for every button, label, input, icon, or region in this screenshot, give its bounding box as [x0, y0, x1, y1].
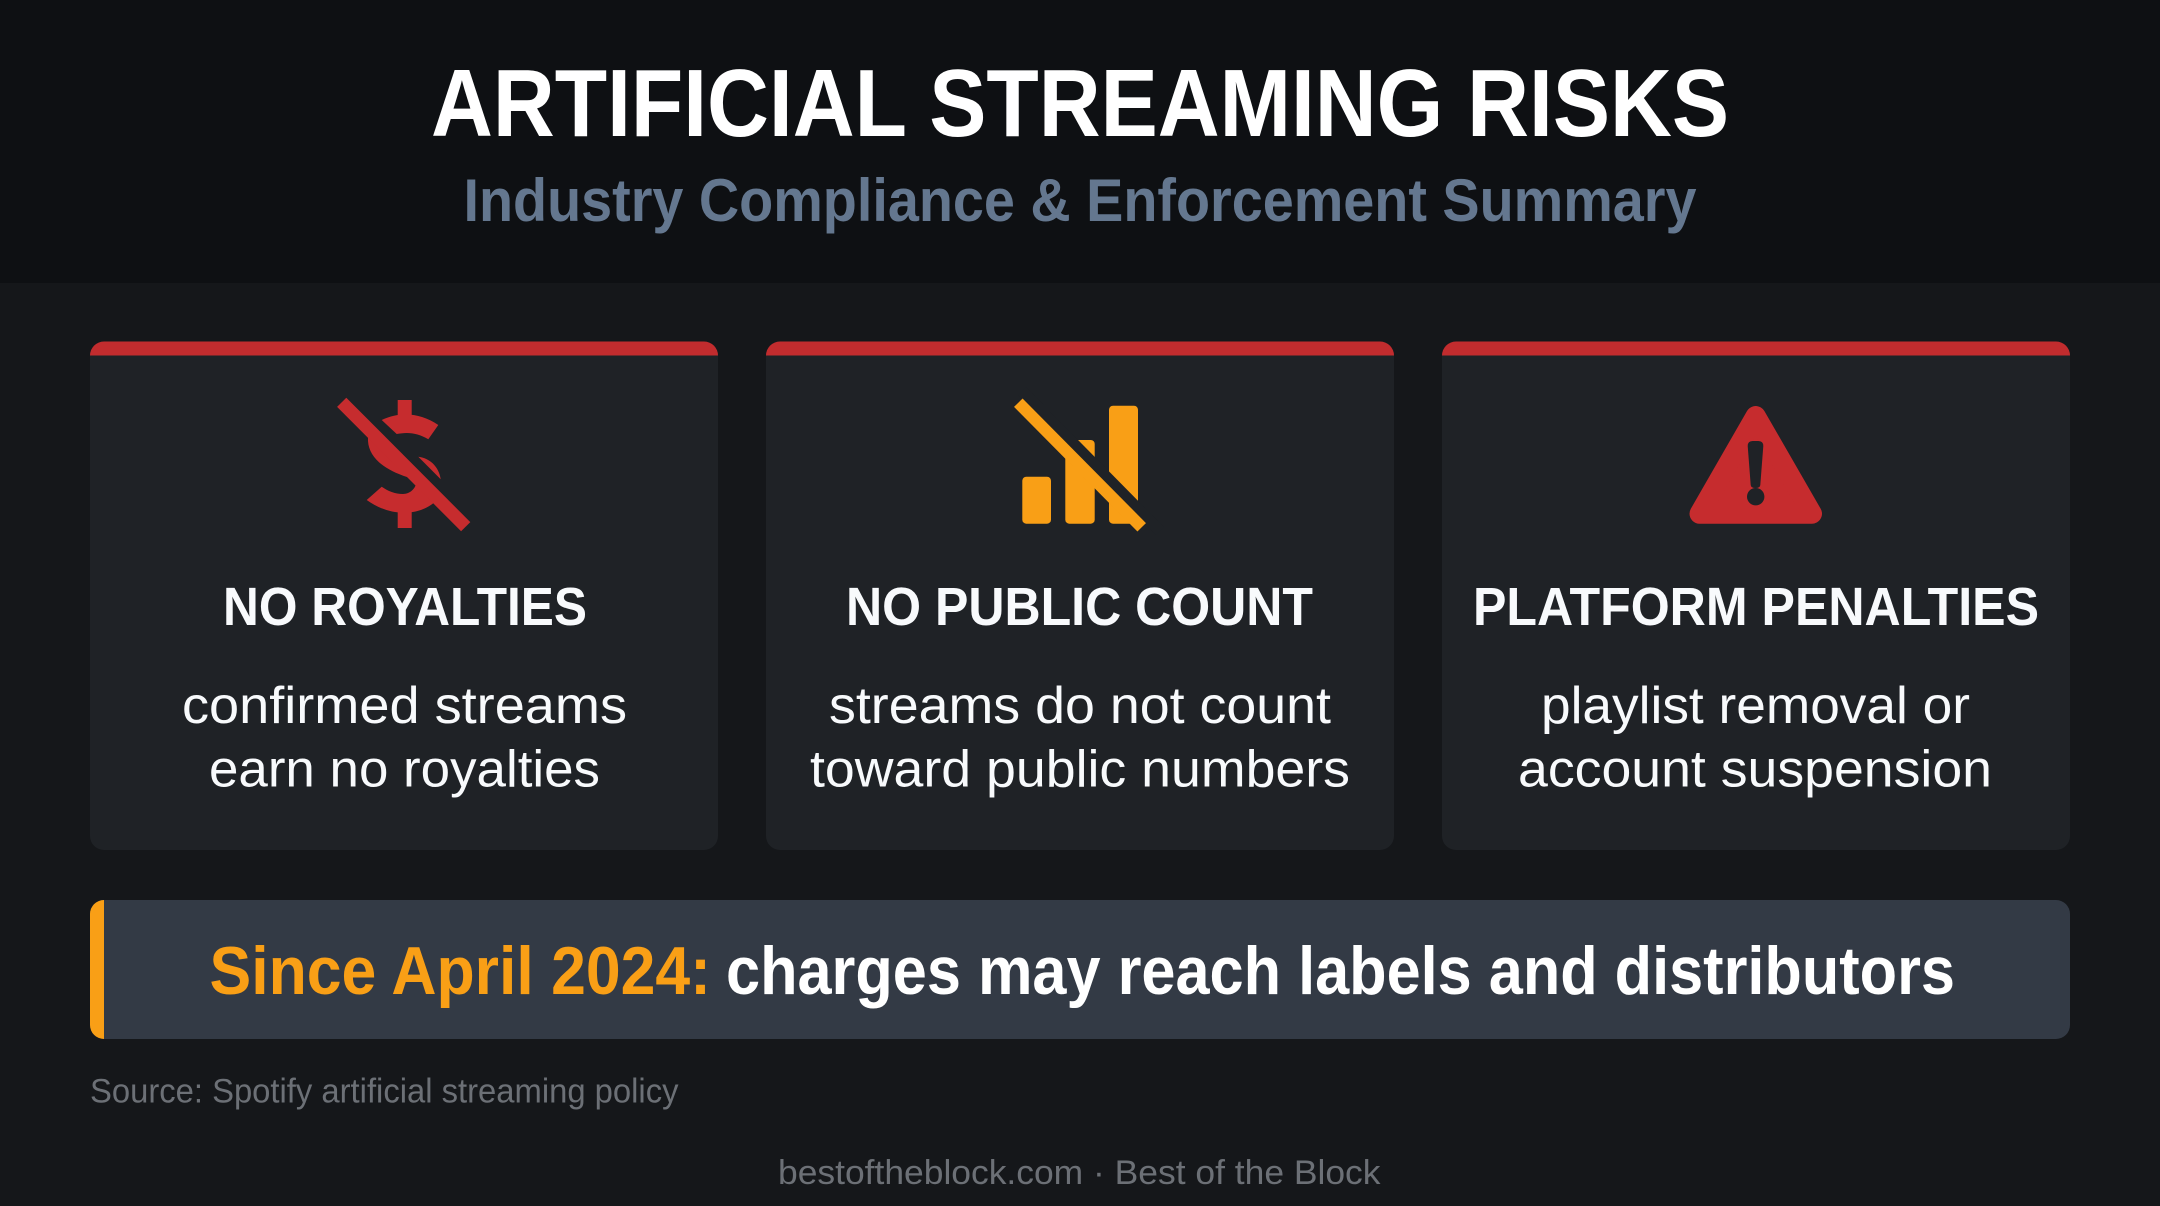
callout date: Since April 2024: [210, 933, 711, 1009]
description: account suspension [1518, 740, 1992, 798]
callout message: charges may reach labels and distributors [726, 933, 1955, 1009]
description [182, 677, 627, 798]
description: earn no royalties [209, 740, 600, 798]
icon: crossed-out dollar [342, 400, 466, 528]
description: playlist removal or [1541, 677, 1970, 735]
description: confirmed streams [182, 677, 627, 735]
panel: platform penalties [1442, 342, 2070, 850]
footer: bestoftheblock.com · Best of the Block [778, 1154, 1382, 1192]
header band [0, 0, 2160, 283]
subtitle: Industry Compliance & Enforcement Summary [464, 167, 1697, 234]
description: streams do not count [829, 677, 1332, 735]
description: toward public numbers [810, 740, 1350, 798]
heading: NO ROYALTIES [223, 577, 587, 637]
description [810, 677, 1350, 798]
callout banner [90, 900, 2070, 1039]
panel: no public count [766, 342, 1394, 850]
icon: warning triangle [1700, 416, 1812, 514]
heading: NO PUBLIC COUNT [846, 577, 1313, 637]
description [1518, 677, 1992, 798]
source note: Source: Spotify artificial streaming policy [90, 1072, 678, 1110]
title: ARTIFICIAL STREAMING RISKS [431, 50, 1729, 157]
heading: PLATFORM PENALTIES [1473, 577, 2039, 637]
icon: crossed-out bar chart [1018, 391, 1160, 531]
panel: no royalties [90, 342, 718, 850]
